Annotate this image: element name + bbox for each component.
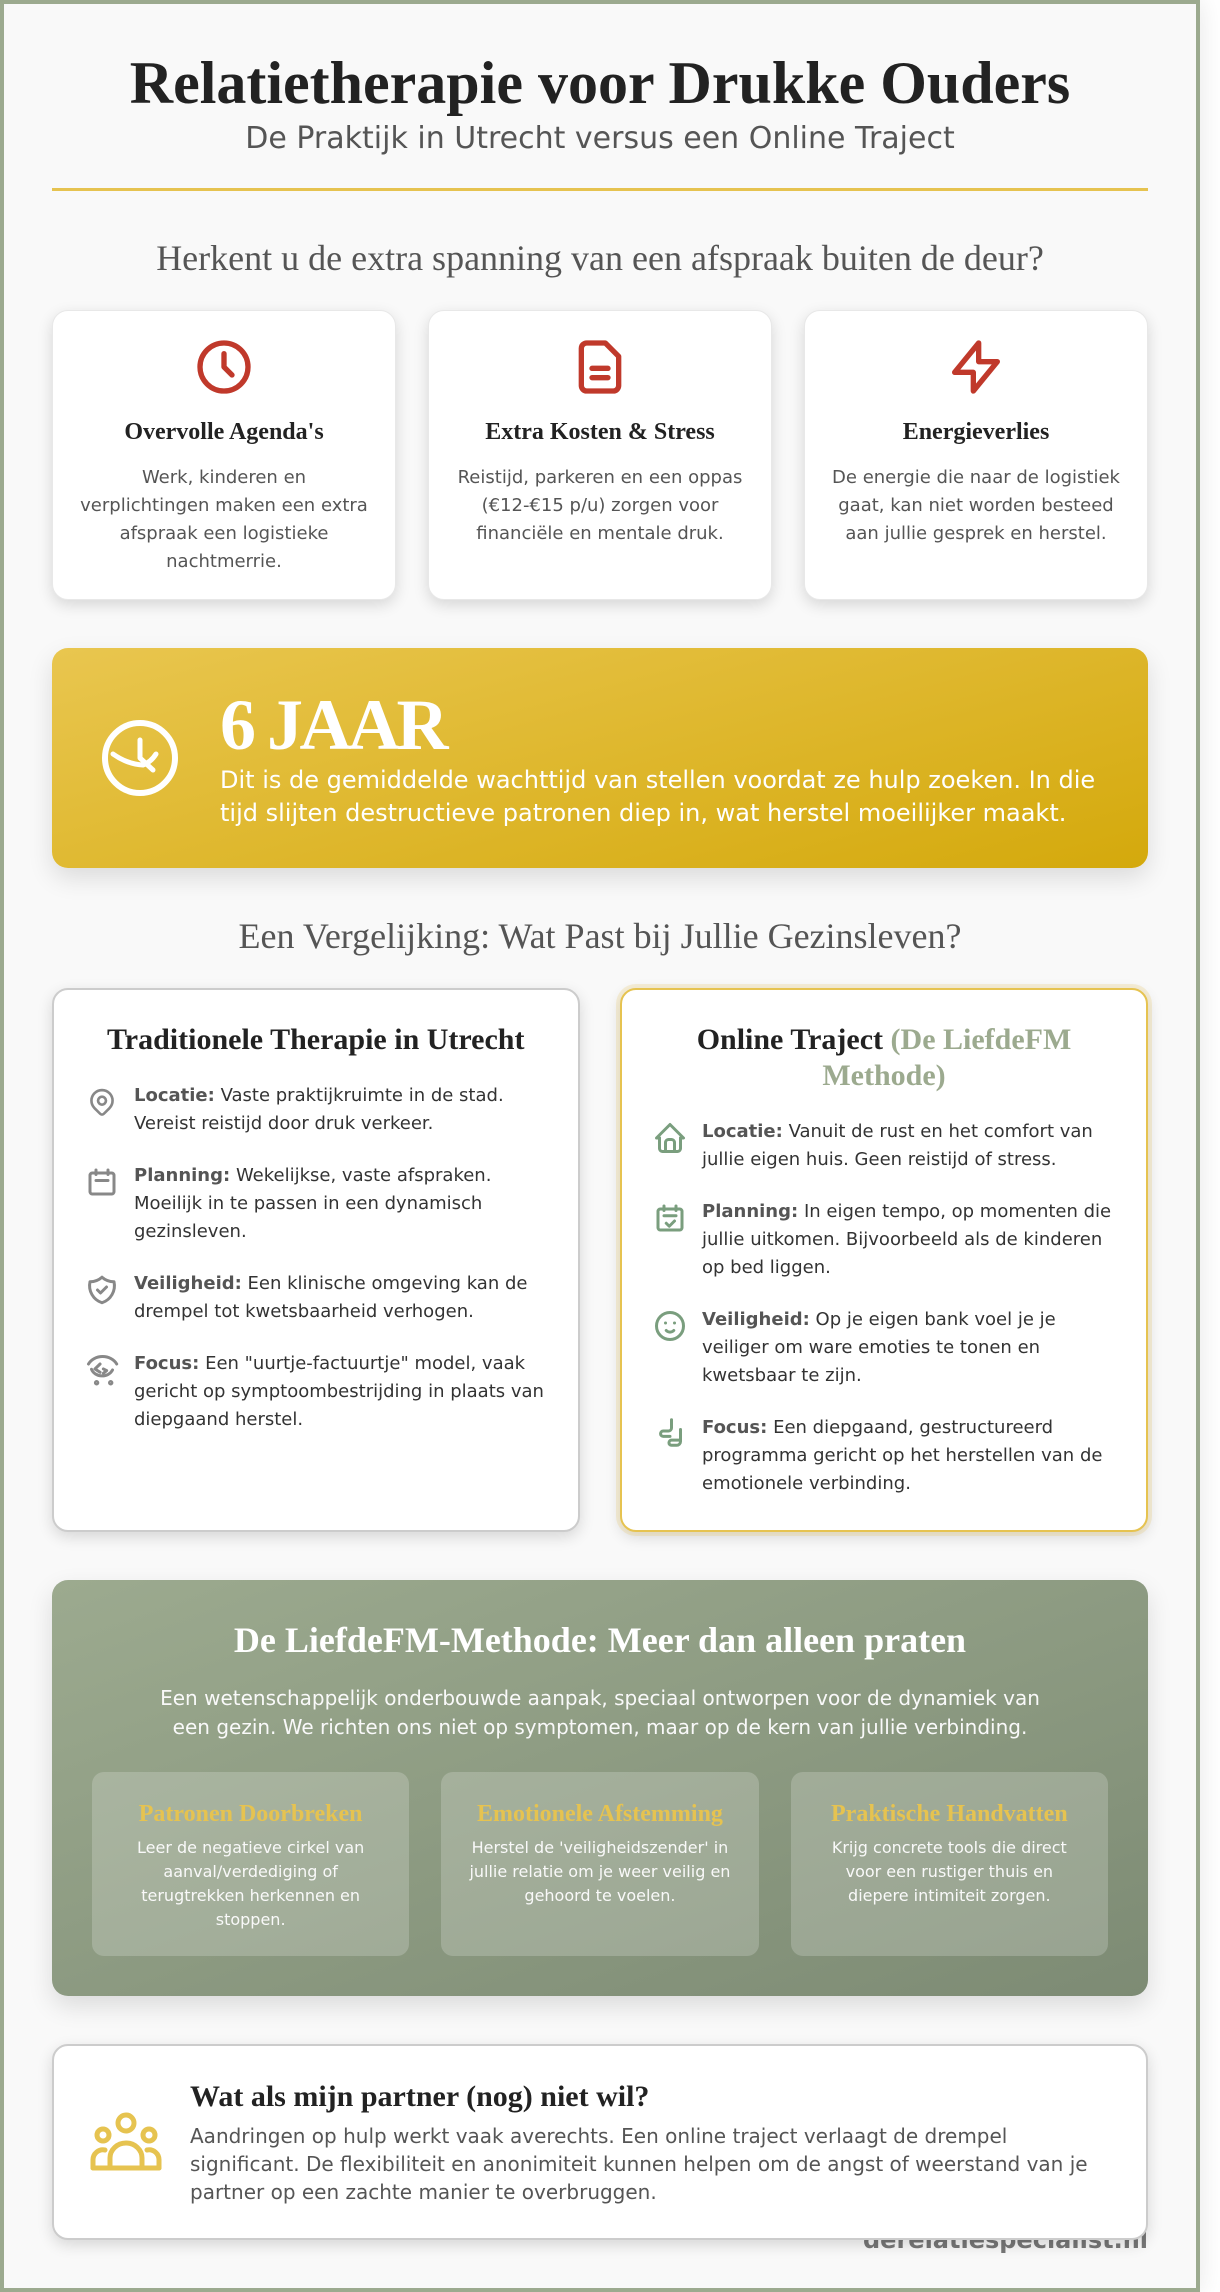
panel: extra kosten: [428, 310, 772, 600]
card heading: Extra Kosten & Stress: [485, 419, 715, 445]
item: veiligheid: Veiligheid: Op je eigen bank voel je je veiliger om ware emoties te tonen en kwetsbaar te zijn.: [702, 1309, 1056, 1386]
panel intro: Een wetenschappelijk onderbouwde aanpak, speciaal ontworpen voor de dynamiek van een gezin. We richten ons niet op symptomen, maar op de kern van jullie verbinding.: [160, 1686, 1040, 1738]
icon: group: [90, 2112, 162, 2170]
item: planning: Planning: Wekelijkse, vaste afspraken. Moeilijk in te passen in een dynamisch gezinsleven.: [134, 1165, 491, 1242]
panel: energieverlies: [804, 310, 1148, 600]
heading: vergelijking: Een Vergelijking: Wat Past bij Jullie Gezinsleven?: [238, 916, 961, 956]
item: locatie: Locatie: Vanuit de rust en het comfort van jullie eigen huis. Geen reistijd of stress.: [702, 1121, 1093, 1170]
panel: 6 jaar banner: [52, 648, 1148, 868]
panel heading: Traditionele Therapie in Utrecht: [107, 1023, 524, 1056]
card: afstemming: [441, 1772, 759, 1956]
subtitle: De Praktijk in Utrecht versus een Online Traject: [245, 121, 955, 156]
card text: Reistijd, parkeren en een oppas (€12-€15 p/u) zorgen voor financiële en mentale druk.: [458, 467, 742, 544]
big number: 6 JAAR: [220, 685, 445, 765]
card heading: Energieverlies: [903, 419, 1049, 445]
card text: De energie die naar de logistiek gaat, kan niet worden besteed aan jullie gesprek en herstel.: [832, 467, 1120, 544]
item: locatie: Locatie: Vaste praktijkruimte in de stad. Vereist reistijd door druk verkeer.: [134, 1085, 504, 1134]
icon: document: [578, 340, 622, 394]
panel: overvolle agenda's: [52, 310, 396, 600]
item: veiligheid: Veiligheid: Een klinische omgeving kan de drempel tot kwetsbaarheid verhogen.: [134, 1273, 527, 1322]
panel: liefdefm-methode: [52, 1580, 1148, 1996]
icon: clock white: [102, 720, 178, 796]
card text: Krijg concrete tools die direct voor een rustiger thuis en diepere intimiteit zorgen.: [832, 1838, 1067, 1905]
item: focus: Focus: Een "uurtje-factuurtje" model, vaak gericht op symptoombestrijding in plaats van diepgaand herstel.: [134, 1353, 544, 1430]
card text: Herstel de 'veiligheidszender' in jullie relatie om je weer veilig en gehoord te voelen.: [469, 1838, 730, 1905]
card text: Leer de negatieve cirkel van aanval/verdediging of terugtrekken herkennen en stoppen.: [137, 1838, 364, 1929]
heading: herkent u: Herkent u de extra spanning van een afspraak buiten de deur?: [156, 238, 1044, 278]
banner text: Dit is de gemiddelde wachttijd van stellen voordat ze hulp zoeken. In die tijd slijten destructieve patronen diep in, wat herstel moeilijker maakt.: [220, 766, 1095, 827]
icon: lightning bolt: [952, 340, 1000, 394]
header rule: [52, 188, 1148, 191]
card heading: Praktische Handvatten: [831, 1801, 1068, 1827]
panel: online traject: [620, 988, 1148, 1532]
card: patronen: [92, 1772, 409, 1956]
item: focus: Focus: Een diepgaand, gestructureerd programma gericht op het herstellen van de emotionele verbinding.: [702, 1417, 1102, 1494]
title: Relatietherapie voor Drukke Ouders: [130, 50, 1070, 116]
card heading: Overvolle Agenda's: [124, 419, 324, 445]
icon: clock: [197, 340, 251, 394]
card text: Werk, kinderen en verplichtingen maken een extra afspraak een logistieke nachtmerrie.: [80, 467, 368, 572]
card heading: Patronen Doorbreken: [139, 1801, 363, 1827]
panel heading: De LiefdeFM-Methode: Meer dan alleen praten: [234, 1620, 966, 1660]
text: Aandringen op hulp werkt vaak averechts. Een online traject verlaagt de drempel significant. De flexibiliteit en anonimiteit kunnen helpen om de angst of weerstand van je partner op een zachte manier te overbruggen.: [190, 2124, 1088, 2204]
panel: partner: [52, 2044, 1148, 2240]
panel: traditionele therapie: [52, 988, 580, 1532]
panel heading: Online Traject (De LiefdeFM Methode): [697, 1023, 1071, 1092]
card heading: Emotionele Afstemming: [477, 1801, 723, 1827]
card: handvatten: [791, 1772, 1108, 1956]
heading: Wat als mijn partner (nog) niet wil?: [190, 2080, 649, 2113]
item: planning: Planning: In eigen tempo, op momenten die jullie uitkomen. Bijvoorbeeld als de kinderen op bed liggen.: [702, 1201, 1111, 1278]
footer brand: derelatiespecialist.nl: [863, 2226, 1148, 2254]
